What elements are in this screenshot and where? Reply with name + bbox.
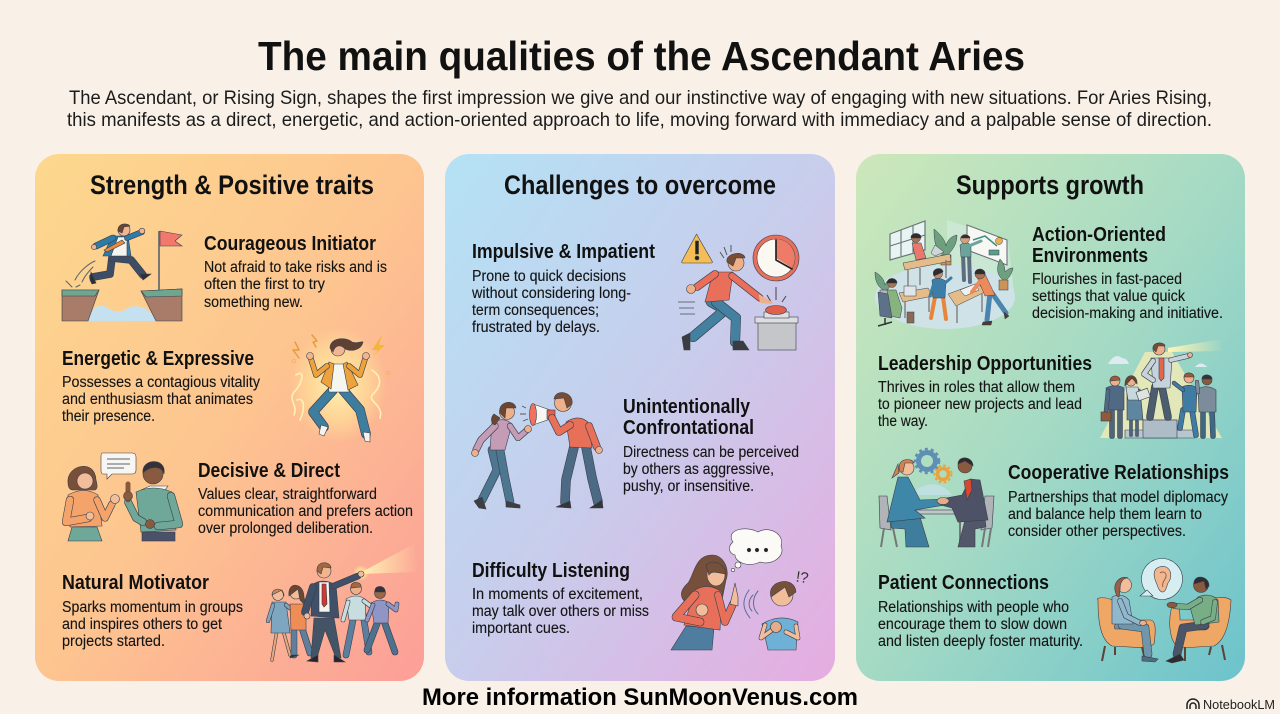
item text xyxy=(62,599,243,650)
NotebookLM badge: NotebookLM xyxy=(1203,697,1275,712)
item text: Sparks momentum in groups xyxy=(62,599,243,616)
item text: and listen deeply foster maturity. xyxy=(878,633,1083,650)
item text: Partnerships that model diplomacy xyxy=(1008,489,1228,506)
item heading: Leadership Opportunities xyxy=(878,353,1092,375)
item text xyxy=(878,379,1082,430)
item text xyxy=(623,444,799,495)
item heading: Action-Oriented xyxy=(1032,224,1166,246)
item text: without considering long- xyxy=(471,285,631,302)
item text: by others as aggressive, xyxy=(623,461,774,478)
item text xyxy=(1032,271,1223,322)
icon: leader pointing a beam of light with a group xyxy=(268,544,418,662)
item heading: Impulsive & Impatient xyxy=(472,241,655,263)
item text: important cues. xyxy=(472,620,570,637)
item: Action-Oriented Environments xyxy=(875,220,1223,329)
item heading: Decisive & Direct xyxy=(198,460,340,482)
item text: may talk over others or miss xyxy=(472,603,649,620)
item heading: Confrontational xyxy=(623,417,754,439)
item heading: Difficulty Listening xyxy=(472,560,630,582)
item text: their presence. xyxy=(62,408,155,425)
item text: and balance help them learn to xyxy=(1008,506,1202,523)
item heading: Patient Connections xyxy=(878,572,1049,594)
item text xyxy=(204,259,387,311)
item: Courageous Initiator xyxy=(62,224,387,321)
panel heading: Supports growth xyxy=(956,170,1144,200)
icon: man rushing to press a button under a clock xyxy=(678,234,799,350)
item text: often the first to try xyxy=(204,276,325,293)
panel: supports growth xyxy=(856,154,1245,681)
item text: frustrated by delays. xyxy=(472,319,600,336)
item text: to pioneer new projects and lead xyxy=(878,396,1082,413)
item text: and inspires others to get xyxy=(62,616,223,633)
item text: pushy, or insensitive. xyxy=(623,478,754,495)
item: Cooperative Relationships xyxy=(879,449,1229,547)
intro text: The Ascendant, or Rising Sign, shapes the first impression we give and our instinctive way of engaging with new situations. For Aries Rising, xyxy=(69,87,1212,109)
item text xyxy=(878,599,1083,650)
icon: two people shaking hands with gears xyxy=(879,449,994,547)
icon: energetic woman jumping xyxy=(290,327,390,443)
item heading xyxy=(1032,224,1166,267)
item text xyxy=(198,486,413,537)
item text: Flourishes in fast-paced xyxy=(1032,271,1182,288)
item heading: Cooperative Relationships xyxy=(1008,462,1229,484)
item: Patient Connections xyxy=(878,558,1231,663)
panel: strength and positive traits xyxy=(35,154,424,681)
item text: Possesses a contagious vitality xyxy=(62,374,260,391)
panel heading: Challenges to overcome xyxy=(504,170,776,200)
icon: two people in conversation xyxy=(66,453,179,541)
item: Difficulty Listening xyxy=(472,529,810,650)
item text: communication and prefers action xyxy=(198,503,413,520)
icon: man leaping between cliffs xyxy=(62,224,182,321)
item text: consider other perspectives. xyxy=(1008,523,1186,540)
item: Leadership Opportunities xyxy=(878,339,1223,438)
intro text xyxy=(67,87,1212,131)
icon: man shouting through a megaphone at a woman xyxy=(472,393,603,509)
item text: Values clear, straightforward xyxy=(198,486,377,503)
item text: term consequences; xyxy=(472,302,599,319)
intro text: this manifests as a direct, energetic, and action-oriented approach to life, moving forward with immediacy and a palpable sense of direction. xyxy=(67,109,1212,131)
icon: two people in armchairs with ear speech bubble xyxy=(1098,558,1231,663)
item text: projects started. xyxy=(62,633,165,650)
item heading: Environments xyxy=(1032,245,1148,267)
item text: Not afraid to take risks and is xyxy=(204,259,387,276)
footer link text: More information SunMoonVenus.com xyxy=(422,684,858,711)
item: Decisive and Direct xyxy=(66,453,413,541)
icon: leader on podium pointing forward xyxy=(1100,339,1223,438)
icon: busy open office with desks and whiteboard xyxy=(875,220,1015,329)
item text: Thrives in roles that allow them xyxy=(878,379,1075,396)
item text: something new. xyxy=(204,294,303,311)
icon: woman talking over a boy with thought bubble: !? xyxy=(795,569,810,587)
item heading: Energetic & Expressive xyxy=(62,348,254,370)
item text xyxy=(472,586,649,637)
item text xyxy=(471,268,631,336)
item: Energetic and Expressive xyxy=(62,327,390,443)
item heading: Courageous Initiator xyxy=(204,233,376,255)
panel: challenges to overcome xyxy=(445,154,835,681)
item: Natural Motivator xyxy=(62,544,418,662)
item text: over prolonged deliberation. xyxy=(198,520,373,537)
item: Unintentionally Confrontational xyxy=(472,393,799,509)
item text: Relationships with people who xyxy=(878,599,1069,616)
item text: Prone to quick decisions xyxy=(472,268,626,285)
panel heading: Strength & Positive traits xyxy=(90,170,374,200)
item text: and enthusiasm that animates xyxy=(62,391,253,408)
item heading xyxy=(623,396,754,439)
item heading: Unintentionally xyxy=(623,396,751,418)
item text: encourage them to slow down xyxy=(878,616,1067,633)
item text xyxy=(62,374,260,425)
item heading: Natural Motivator xyxy=(62,572,209,594)
item text: Directness can be perceived xyxy=(623,444,799,461)
item text: decision-making and initiative. xyxy=(1032,305,1223,322)
item text xyxy=(1008,489,1228,540)
title: The main qualities of the Ascendant Aries xyxy=(258,33,1025,79)
item: Impulsive and Impatient xyxy=(471,234,799,350)
item text: In moments of excitement, xyxy=(472,586,643,603)
item text: settings that value quick xyxy=(1032,288,1185,305)
icon: woman talking over a boy with thought bubble xyxy=(671,529,810,650)
item text: the way. xyxy=(878,413,928,430)
